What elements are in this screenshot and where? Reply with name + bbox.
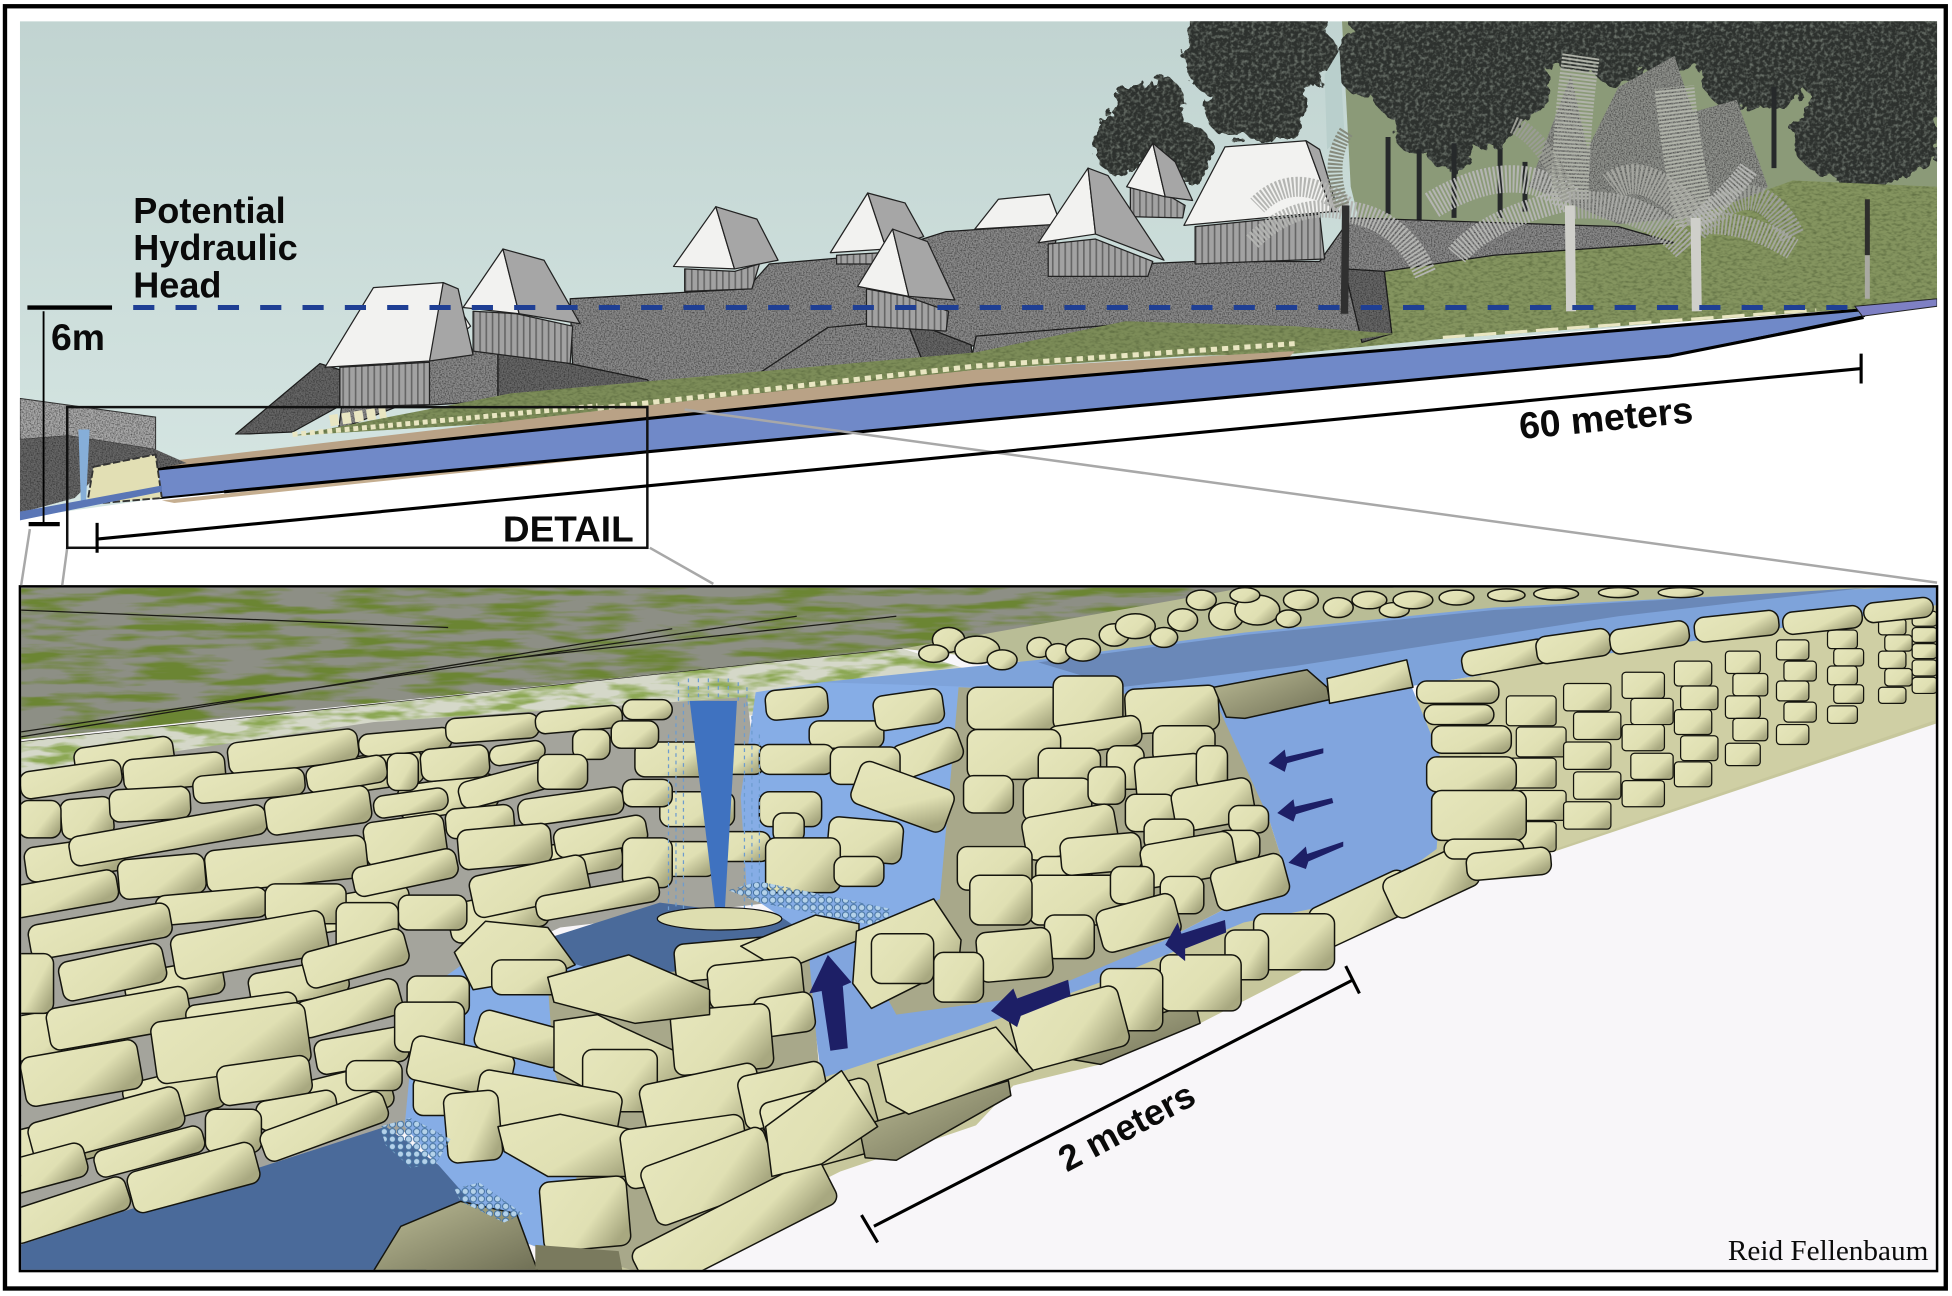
panel: site overview section <box>20 12 1952 520</box>
stone column at right of pool <box>1417 681 1552 881</box>
small stone wall at fountain <box>87 454 162 504</box>
zoom guide lines <box>21 410 1937 585</box>
front terrace left <box>339 349 498 430</box>
left lower wall block <box>20 398 187 513</box>
fountain spray <box>669 678 759 921</box>
small block wall receding <box>1481 605 1937 874</box>
building walls <box>340 362 429 407</box>
arrow: small lower <box>1288 842 1343 869</box>
annotation: hydraulic head dashed line <box>133 306 1855 310</box>
label: potential hydraulic head: Head <box>133 265 221 306</box>
low water strip <box>20 486 162 520</box>
cobbles on far bank <box>919 588 1703 670</box>
arrow: up through channel <box>809 955 852 1051</box>
grass strip along path <box>293 321 1394 436</box>
60 meters dimension line <box>97 354 1861 553</box>
water: lower channel <box>803 687 1443 1078</box>
fountain jet <box>690 701 737 915</box>
tan footpath <box>152 351 1295 471</box>
annotation: 6m vertical dimension <box>27 308 112 524</box>
water: cascade behind rocks <box>741 682 983 934</box>
stone wall: central section <box>871 660 1413 1002</box>
water: upper channel <box>822 585 1937 720</box>
bubbles at lower pool <box>380 1118 451 1168</box>
palm trunks <box>1344 205 1346 314</box>
channel outlet strip <box>1855 299 1937 316</box>
rows of small blocks <box>1506 611 1937 852</box>
stone lip along top of bank <box>1460 596 1934 677</box>
fountain basin <box>657 908 782 930</box>
central rock mound <box>395 899 961 1296</box>
pale vegetation band <box>20 649 996 809</box>
label: author credit: Reid Fellenbaum <box>1728 1235 1928 1267</box>
flow arrows <box>809 748 1343 1051</box>
big front rock and top block <box>373 955 710 1271</box>
label: 60 meters: 60 meters <box>1517 389 1695 447</box>
arrow: lower channel <box>991 980 1071 1027</box>
panel: enlarged detail view <box>20 586 1937 1271</box>
far bank backdrop <box>903 588 1937 666</box>
fountain in overview <box>78 430 90 504</box>
stone backing: central wall <box>859 687 1287 1015</box>
front terrace centre <box>760 323 920 372</box>
sky gaps and tree trunks <box>1325 50 1774 230</box>
grass terrace texture <box>20 588 1394 740</box>
label: detail: DETAIL <box>503 509 634 550</box>
dark gaps behind stones <box>20 697 772 1247</box>
label: 2 meters: 2 meters <box>1051 1074 1202 1180</box>
stone wall: left section <box>0 700 672 1246</box>
detail box <box>67 407 647 548</box>
sky <box>20 21 1694 512</box>
water channel <box>154 310 1864 498</box>
lower pool <box>21 1127 472 1270</box>
upper pool <box>555 902 792 972</box>
palm fronds <box>1251 56 1793 274</box>
label: 6m: 6m <box>51 316 105 358</box>
hillside pale foliage backdrop <box>1342 21 1937 261</box>
filler stones: left wall <box>0 735 771 1179</box>
buildings <box>325 141 1338 407</box>
front terrace right <box>972 324 1110 353</box>
forest trees <box>1092 21 1938 186</box>
2 meters dimension line <box>861 966 1359 1242</box>
wall buttress <box>1344 269 1392 342</box>
stone bank: front edge of channel <box>766 842 1483 1176</box>
rear stone bank base <box>535 605 1937 1271</box>
stone wall masses <box>235 218 1674 434</box>
stone backing: central mound <box>548 959 871 1271</box>
arrow: mid channel <box>1165 920 1226 961</box>
label: potential hydraulic head: Hydraulic <box>133 227 298 268</box>
terrace edge lines <box>20 610 903 742</box>
roofs <box>325 283 471 367</box>
bubbles at fountain <box>728 881 890 927</box>
pale palm fan mass <box>1529 56 1768 224</box>
label: potential hydraulic head: Potential <box>133 190 286 231</box>
arrow: small middle <box>1277 798 1333 822</box>
dark foreground tree trunk <box>1865 199 1869 299</box>
palm trees <box>1251 56 1793 314</box>
hillside grass <box>1120 181 1937 357</box>
arrow: small upper <box>1269 748 1323 772</box>
stone pier with cascade behind fountain <box>759 686 966 893</box>
rear terrace walls <box>235 218 1674 434</box>
rock strip along path <box>293 310 1816 434</box>
left slope <box>235 364 340 434</box>
